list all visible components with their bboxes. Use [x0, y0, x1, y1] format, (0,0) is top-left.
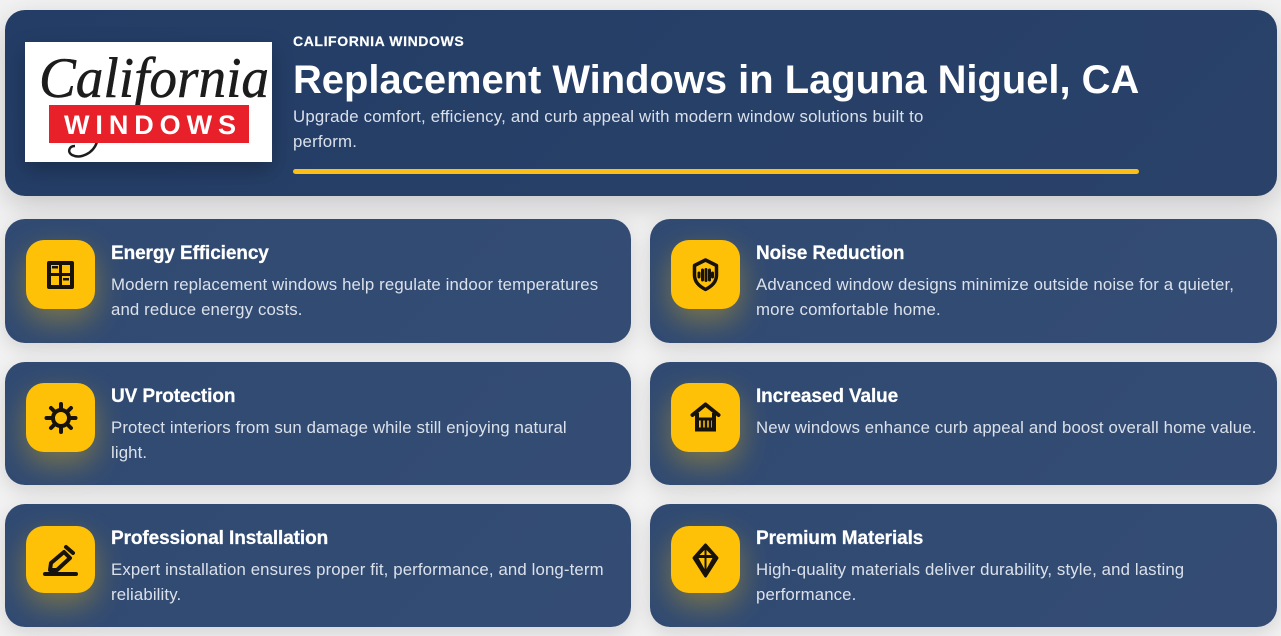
logo: California Windows: California	[39, 47, 269, 110]
description: performance.	[756, 584, 856, 604]
logo: California Windows: WINDOWS	[64, 110, 236, 140]
icon: sun	[26, 383, 95, 452]
description: more comfortable home.	[756, 300, 941, 318]
description	[111, 274, 598, 318]
description	[756, 274, 1234, 318]
heading: Energy Efficiency	[111, 243, 269, 264]
logo: California Windows	[25, 42, 272, 162]
description: and reduce energy costs.	[111, 300, 303, 318]
heading: UV Protection	[111, 386, 235, 407]
subtitle: perform.	[293, 132, 357, 150]
description	[111, 560, 604, 604]
icon: pencil	[26, 526, 95, 593]
panel: energy efficiency	[5, 219, 631, 343]
heading: Professional Installation	[111, 528, 328, 549]
panel: UV protection	[5, 362, 631, 485]
icon: house	[671, 383, 740, 452]
subtitle	[293, 106, 924, 150]
description: Protect interiors from sun damage while still enjoying natural	[111, 418, 567, 436]
panel: increased value	[650, 362, 1277, 485]
panel: premium materials	[650, 504, 1277, 627]
eyebrow label: CALIFORNIA WINDOWS	[293, 32, 464, 48]
description: High-quality materials deliver durability, style, and lasting	[756, 560, 1184, 578]
description	[756, 560, 1184, 604]
icon: gem	[671, 526, 740, 593]
header banner	[5, 10, 1277, 196]
panel: professional installation	[5, 504, 631, 627]
icon: shield with sound bars	[671, 240, 740, 309]
description: Expert installation ensures proper fit, performance, and long-term	[111, 560, 604, 578]
heading: Noise Reduction	[756, 243, 904, 264]
description: Advanced window designs minimize outside noise for a quieter,	[756, 274, 1234, 294]
heading: Premium Materials	[756, 528, 923, 549]
accent bar	[293, 169, 1139, 174]
panel: noise reduction	[650, 219, 1277, 343]
title: Replacement Windows in Laguna Niguel, CA	[293, 58, 1139, 102]
description: light.	[111, 442, 147, 462]
subtitle: Upgrade comfort, efficiency, and curb appeal with modern window solutions built to	[293, 106, 924, 126]
description: reliability.	[111, 584, 181, 604]
description	[111, 418, 567, 462]
heading: Increased Value	[756, 386, 898, 407]
description: Modern replacement windows help regulate indoor temperatures	[111, 274, 598, 294]
description: New windows enhance curb appeal and boost overall home value.	[756, 418, 1256, 436]
icon: window grid	[26, 240, 95, 309]
